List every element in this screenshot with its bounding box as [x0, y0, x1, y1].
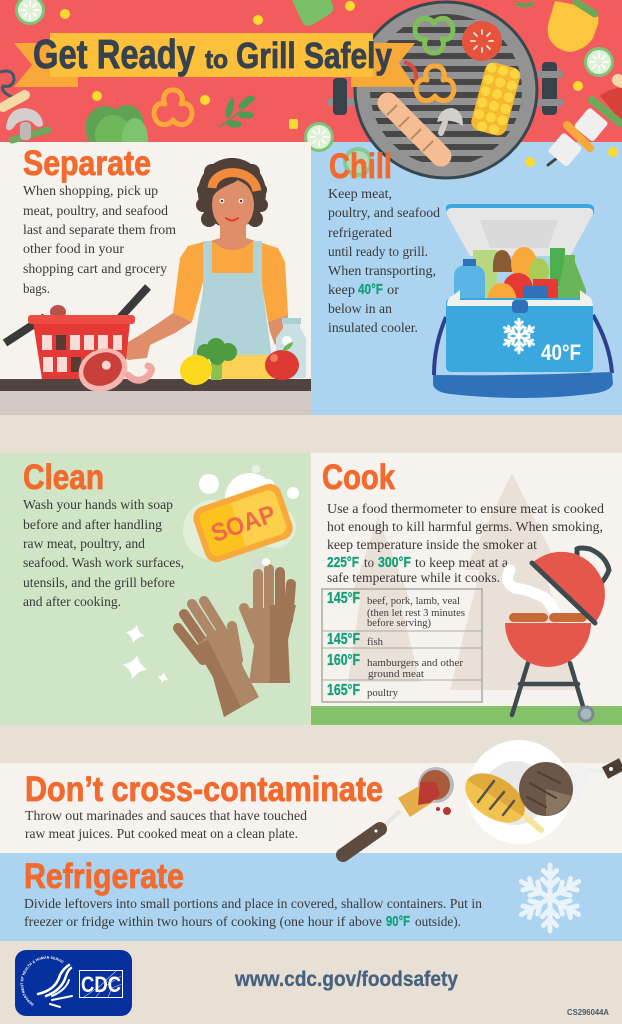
text: chill body: below in an: [328, 301, 392, 316]
icon: HHS eagle: [38, 965, 72, 1007]
text: cook body: to: [364, 555, 374, 570]
trees background: [348, 473, 575, 690]
icon: snowflake: [502, 319, 536, 353]
title: Grill Safely: [236, 35, 392, 76]
table: safe temperatures: beef, pork, lamb, veal: [367, 596, 460, 607]
icon: green pepper top: [292, 0, 333, 26]
text: cook body: safe temperature while it cooks.: [327, 570, 500, 585]
text: clean body: utensils, and the grill before: [23, 575, 175, 590]
panel: clean background: [0, 453, 310, 725]
text: separate body: meat, poultry, and seafood: [23, 203, 168, 218]
title: Get Ready: [33, 31, 195, 77]
panel: refrigerate background: [0, 853, 622, 941]
table: safe temperatures: poultry: [367, 688, 399, 699]
panel: chill background: [311, 142, 622, 415]
text: chill body: insulated cooler.: [328, 320, 418, 335]
icon: red ring fragment: [404, 62, 416, 82]
text: cook body: 300°F: [378, 554, 411, 571]
ring text: HHS: DEPARTMENT OF HEALTH & HUMAN SERVICES USA: [20, 956, 64, 1006]
text: cross-contaminate body: raw meat juices. Put cooked meat on a clean plate.: [25, 826, 298, 841]
section: refrigerate: [24, 857, 582, 931]
icon: grill from above: [328, 2, 563, 178]
text: cook body: 225°F: [327, 554, 359, 571]
icon: lettuce: [85, 105, 148, 142]
icon: left skewer: [0, 71, 48, 140]
heading: refrigerate: Refrigerate: [24, 857, 184, 896]
text: clean body: raw meat, poultry, and: [23, 536, 145, 551]
text: cook body: Use a food thermometer to ensure meat is cooked: [327, 501, 604, 516]
icon: mushroom on grill: [437, 108, 463, 133]
text: clean body: seafood. Wash work surfaces,: [23, 555, 184, 570]
text: separate body: last and separate them from: [23, 222, 177, 237]
text: chill body: or: [387, 282, 400, 297]
icon: cheese: [222, 355, 274, 379]
icon: orange pepper ring: [154, 90, 192, 125]
table: safe temperatures: fish: [367, 637, 384, 648]
title ribbon: [14, 33, 415, 87]
table: safe temperatures: 160°F: [327, 652, 360, 669]
icon: apple: [265, 342, 299, 380]
text: refrigerate body: [24, 896, 482, 930]
text: chill body: refrigerated: [328, 225, 392, 240]
section: clean: [23, 458, 299, 717]
yellow dots: [60, 1, 583, 129]
text: cook body: [327, 501, 604, 585]
icon: orange pepper on grill: [416, 66, 454, 101]
text: separate body: bags.: [23, 281, 50, 296]
icon: cucumber behind heading: [343, 147, 373, 177]
text: separate body: shopping cart and grocery: [23, 261, 167, 276]
section: cook: [311, 458, 622, 725]
text: chill body: 40°F: [358, 281, 383, 298]
icon: gloves: [178, 557, 296, 717]
illustration: cooler: [433, 204, 613, 398]
heading: separate: Separate: [23, 144, 151, 183]
icon: CDC box: CDC: [81, 972, 121, 997]
text: chill body: until ready to grill.: [328, 244, 428, 259]
header banner: [0, 0, 622, 178]
section: separate: [0, 144, 311, 415]
icon: leaf branch: [219, 94, 256, 128]
text: separate body: [23, 183, 177, 296]
heading: chill: Chill: [329, 147, 392, 186]
label: 40 F: 40°F: [541, 340, 581, 365]
text: refrigerate body: Divide leftovers into small portions and place in covered, shallow containers. Put in: [24, 896, 482, 911]
text: separate body: other food in your: [23, 241, 125, 256]
heading: don't cross-contaminate: Don’t cross-contaminate: [25, 770, 383, 809]
icon: plate with chicken and burger: [456, 740, 622, 844]
table: safe temperatures: 145°F: [327, 631, 360, 648]
table: safe temperatures: 145°F: [327, 590, 360, 607]
icon: sparkles: [120, 623, 170, 685]
table: safe temperatures: before serving): [367, 618, 431, 629]
illustration: woman: [118, 158, 288, 360]
url: www.cdc.gov/foodsafety: [234, 968, 458, 991]
panel: separate background: [0, 142, 311, 415]
text: chill body: Keep meat,: [328, 186, 392, 201]
table: safe temperatures: [322, 589, 482, 702]
icon: green pepper on grill: [415, 18, 453, 53]
icon: cucumber slices: [15, 0, 614, 152]
text: cook body: keep temperature inside the smoker at: [327, 537, 537, 552]
text: cook body: hot enough to kill harmful germs. When smoking,: [327, 519, 603, 534]
table: safe temperatures: ground meat: [368, 669, 424, 680]
icon: bottle: [276, 318, 306, 378]
text: chill body: [328, 186, 440, 335]
ground: [311, 706, 622, 725]
counter: [0, 379, 311, 415]
icon: shrimp: [128, 366, 152, 380]
panel: cross-contaminate background: [0, 763, 622, 853]
icon: right skewer: [525, 80, 622, 167]
text: clean body: [23, 497, 184, 609]
text: clean body: before and after handling: [23, 517, 162, 532]
text: cross-contaminate body: Throw out marinades and sauces that have touched: [25, 808, 307, 823]
text: refrigerate body: outside).: [415, 914, 461, 929]
section: don't cross-contaminate: [25, 740, 622, 855]
title: to: [205, 44, 228, 74]
icon: shopping basket: [5, 287, 148, 379]
text: clean body: Wash your hands with soap: [23, 497, 173, 512]
icon: broccoli: [197, 338, 237, 380]
icon: corn: [469, 60, 522, 137]
table: safe temperatures: 165°F: [327, 682, 360, 699]
text: chill body: keep: [328, 282, 355, 297]
text: refrigerate body: 90°F: [386, 913, 410, 930]
heading: clean: Clean: [23, 458, 104, 497]
icon: kettle grill: [505, 548, 609, 721]
icon: soap and bubbles: SOAP: [208, 500, 279, 548]
icon: sausage: [387, 103, 441, 156]
text: chill body: poultry, and seafood: [328, 205, 440, 220]
logo: HHS and CDC: [15, 950, 132, 1016]
icon: basting brush with sauce: [343, 767, 454, 855]
text: cook body: to keep meat at a: [415, 555, 508, 570]
text: chill body: When transporting,: [328, 263, 436, 278]
text: cross-contaminate body: [25, 808, 307, 841]
icon: tomato: [462, 21, 502, 61]
heading: cook: Cook: [322, 458, 395, 497]
icon: yellow pepper: [516, 1, 598, 52]
section: chill: [328, 147, 613, 398]
text: clean body: and after cooking.: [23, 594, 121, 609]
icon: soap and bubbles: [183, 465, 299, 565]
title: [33, 31, 392, 77]
text: separate body: When shopping, pick up: [23, 183, 158, 198]
icon: snowflake: [518, 865, 582, 931]
icon: steak: [71, 340, 135, 400]
text: refrigerate body: freezer or fridge within two hours of cooking (one hour if above: [24, 914, 382, 929]
table: safe temperatures: hamburgers and other: [367, 658, 464, 669]
panel: cook background: [311, 453, 622, 725]
publication code: CS296044A: [567, 1008, 609, 1017]
table: safe temperatures: (then let rest 3 minutes: [367, 608, 465, 619]
icon: lemon: [177, 351, 215, 389]
